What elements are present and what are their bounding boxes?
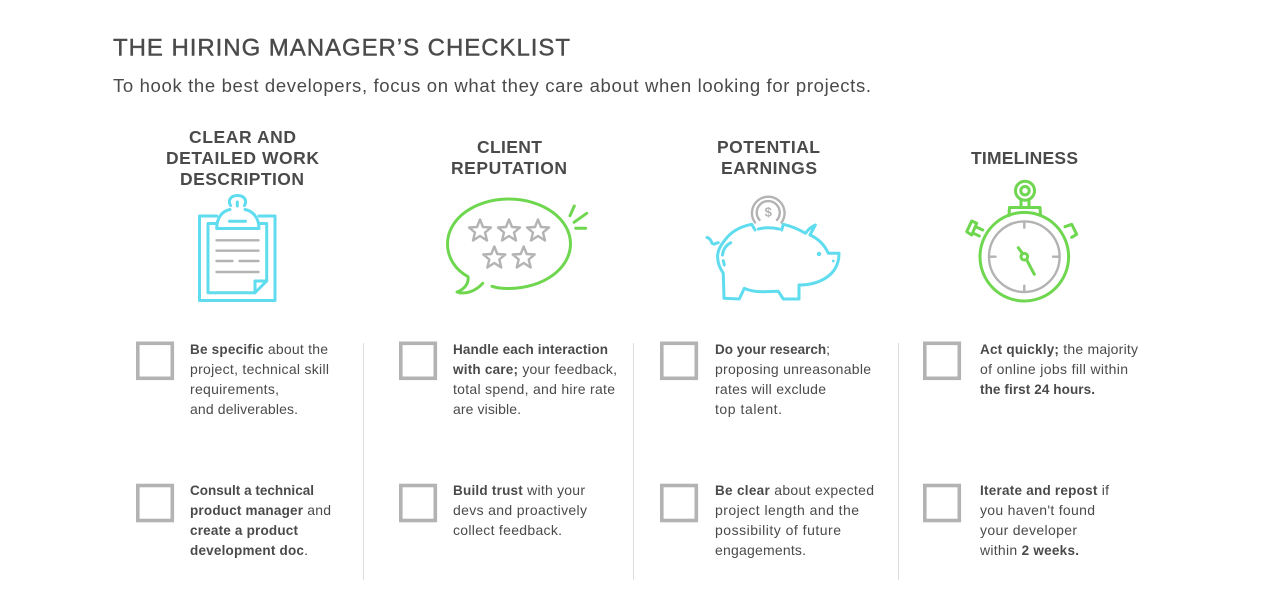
text block: do your research: rates will exclude — [715, 381, 826, 397]
heading: potential earnings: POTENTIAL — [717, 137, 820, 157]
icon: speech bubble with stars — [448, 199, 587, 293]
heading: timeliness: TIMELINESS — [971, 148, 1078, 168]
heading: clear and detailed work description — [166, 127, 319, 189]
text block: handle each interaction — [452, 342, 617, 417]
checkbox — [925, 343, 959, 378]
icon: stopwatch — [967, 181, 1077, 301]
text block: build trust: collect feedback. — [453, 522, 562, 538]
text block: do your research: proposing unreasonable — [715, 361, 871, 377]
text block: be specific — [190, 341, 329, 417]
checkbox — [138, 343, 172, 378]
checkbox — [401, 343, 435, 378]
text block: be clear: project length and the — [715, 502, 859, 518]
heading: client reputation: REPUTATION — [451, 158, 567, 178]
text block: build trust — [453, 482, 587, 538]
checkbox — [662, 343, 696, 378]
checkbox — [138, 486, 172, 520]
text block: iterate and repost: you haven't found — [980, 502, 1095, 518]
heading: clear and detailed work description: DESCRIPTION — [180, 169, 304, 189]
text block: be specific: and deliverables. — [190, 401, 298, 417]
text block: be clear — [715, 482, 874, 558]
text block: be specific: Be specific about the — [190, 341, 328, 357]
icon: piggy bank with coin — [707, 197, 839, 299]
text block: consult: product manager and — [190, 502, 331, 518]
icon: clipboard — [200, 196, 275, 300]
subtitle: To hook the best developers, focus on what they care about when looking for projects. — [113, 75, 871, 96]
title: THE HIRING MANAGER’S CHECKLIST — [113, 34, 570, 62]
text block: act quickly: the first 24 hours. — [980, 382, 1095, 397]
text block: consult: Consult a technical — [190, 483, 314, 498]
text block: consult: create a product — [190, 523, 298, 538]
text block: do your research: top talent. — [715, 401, 782, 417]
text block: consult — [190, 483, 331, 558]
text block: consult: development doc. — [190, 542, 308, 558]
text block: be clear: Be clear about expected — [715, 482, 874, 498]
checkbox — [401, 486, 435, 520]
text block: handle each interaction: total spend, and hire rate — [453, 381, 615, 397]
text block: iterate and repost — [979, 482, 1109, 558]
text block: be clear: possibility of future — [715, 522, 841, 538]
text block: handle each interaction: Handle each interaction — [453, 342, 608, 357]
icon: piggy bank with coin: $ — [765, 204, 773, 220]
panel: potential earnings — [662, 137, 874, 558]
text block: act quickly: of online jobs fill within — [980, 361, 1128, 377]
heading: potential earnings — [717, 137, 820, 178]
text block: act quickly: Act quickly; the majority — [980, 341, 1138, 357]
text block: be specific: project, technical skill — [190, 361, 329, 377]
heading: client reputation — [451, 137, 567, 178]
text block: iterate and repost: within 2 weeks. — [979, 542, 1079, 558]
text block: handle each interaction: with care; your feedback, — [452, 361, 617, 377]
text block: do your research — [715, 341, 871, 417]
heading: potential earnings: EARNINGS — [721, 158, 817, 178]
heading: client reputation: CLIENT — [477, 137, 542, 157]
heading: clear and detailed work description: CLEAR AND — [189, 127, 296, 147]
text block: iterate and repost: your developer — [980, 522, 1077, 538]
checkbox — [925, 486, 959, 520]
text block: iterate and repost: Iterate and repost if — [980, 482, 1109, 498]
checkbox — [662, 486, 696, 520]
text block: be specific: requirements, — [190, 381, 279, 397]
text block: do your research: Do your research; — [715, 341, 830, 357]
text block: build trust: Build trust with your — [453, 482, 585, 498]
text block: act quickly — [980, 341, 1138, 397]
text block: be clear: engagements. — [715, 542, 806, 558]
heading: clear and detailed work description: DETAILED WORK — [166, 148, 319, 168]
panel: client reputation — [401, 137, 617, 538]
panel: clear and detailed work description — [138, 127, 331, 558]
text block: build trust: devs and proactively — [453, 502, 587, 518]
text block: handle each interaction: are visible. — [453, 401, 521, 417]
panel: timeliness — [925, 148, 1138, 558]
